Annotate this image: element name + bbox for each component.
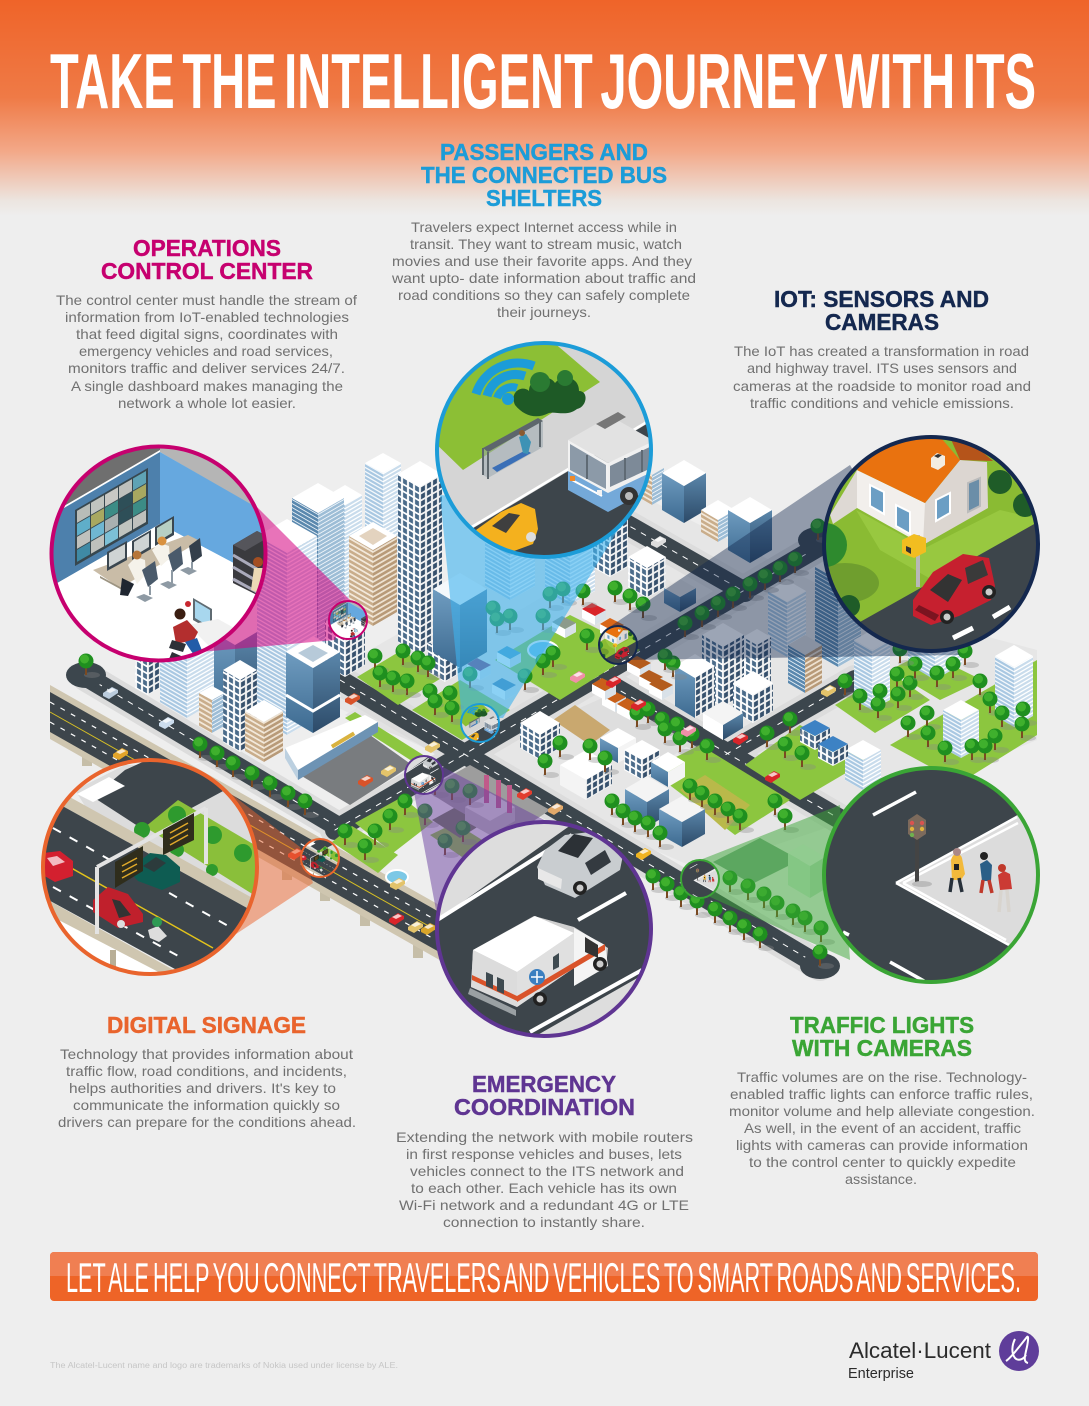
body: operations: A single dashboard makes managing the — [71, 378, 343, 394]
body: emergency: to each other. Each vehicle has its own — [411, 1180, 677, 1196]
heading: iot: CAMERAS — [825, 309, 939, 335]
body: iot: traffic conditions and vehicle emissions. — [750, 395, 1014, 411]
body: operations: network a whole lot easier. — [118, 395, 296, 411]
body: iot: The IoT has created a transformation in road — [734, 343, 1029, 359]
heading: passengers: THE CONNECTED BUS — [421, 162, 667, 188]
body: emergency: Wi-Fi network and a redundant 4G or LTE — [399, 1197, 689, 1213]
panel: passengers — [391, 139, 696, 320]
body: operations: emergency vehicles and road services, — [79, 343, 333, 359]
heading: passengers: SHELTERS — [486, 185, 602, 211]
shopping mall — [285, 715, 378, 780]
car park lot — [713, 838, 800, 884]
body: traffic lights: monitor volume and help alleviate congestion. — [729, 1103, 1035, 1119]
callout beam: digital signage — [227, 793, 313, 940]
body: traffic lights: Traffic volumes are on the rise. Technology- — [737, 1069, 1027, 1085]
dark field — [432, 808, 482, 838]
body: emergency: connection to instantly share. — [443, 1214, 645, 1230]
body: traffic lights: lights with cameras can provide information — [736, 1137, 1028, 1153]
road network — [87, 515, 855, 966]
circle: bus shelter — [430, 335, 660, 565]
body: emergency: Extending the network with mobile routers — [396, 1129, 693, 1145]
cul-de-sacs — [66, 527, 840, 979]
body: operations: The control center must handle the stream of — [56, 292, 357, 308]
parking lot — [295, 735, 412, 805]
small marker: bus shelters — [460, 703, 501, 743]
circle: highway signs — [30, 745, 285, 1048]
circle: house with sensor — [803, 425, 1050, 665]
heading: passengers: PASSENGERS AND — [440, 139, 648, 165]
body: operations — [56, 292, 357, 411]
body: emergency: vehicles connect to the ITS network and — [410, 1163, 684, 1179]
body: iot: cameras at the roadside to monitor road and — [733, 378, 1031, 394]
logo: Enterprise — [848, 1365, 914, 1382]
heading: emergency: COORDINATION — [454, 1094, 635, 1120]
body: passengers — [391, 219, 696, 320]
trees — [78, 518, 1037, 969]
fountain — [386, 870, 408, 884]
callout beam: emergency — [413, 767, 550, 910]
heading: iot — [774, 286, 989, 335]
body: passengers: their journeys. — [497, 304, 591, 320]
panel: iot — [733, 286, 1031, 411]
circle: crossing and traffic light — [815, 760, 1050, 995]
heading: traffic lights: WITH CAMERAS — [792, 1035, 972, 1061]
body: operations: information from IoT-enabled technologies — [65, 309, 349, 325]
header gradient band — [0, 0, 1089, 216]
body: digital signage: traffic flow, road conditions, and incidents, — [66, 1063, 347, 1079]
logo — [848, 1331, 1039, 1382]
factory yard — [425, 765, 550, 840]
heading: digital signage: DIGITAL SIGNAGE — [107, 1012, 306, 1038]
body: passengers: want upto- date information about traffic and — [391, 270, 696, 286]
heading: operations: OPERATIONS — [133, 235, 281, 261]
heading: traffic lights — [790, 1012, 974, 1061]
body: traffic lights: As well, in the event of an accident, traffic — [744, 1120, 1021, 1136]
parks and fields — [332, 615, 1037, 873]
body: operations: that feed digital signs, coordinates with — [76, 326, 338, 342]
buildings back cluster — [135, 453, 595, 762]
vehicles — [103, 536, 836, 935]
small marker: sensors — [595, 624, 639, 666]
heading: emergency — [454, 1071, 635, 1120]
circle: ambulance — [430, 815, 660, 1045]
body: traffic lights — [729, 1069, 1035, 1187]
body: digital signage: drivers can prepare for the conditions ahead. — [58, 1114, 356, 1130]
glass building — [788, 844, 825, 898]
heading: traffic lights: TRAFFIC LIGHTS — [790, 1012, 974, 1038]
heading: emergency: EMERGENCY — [472, 1071, 616, 1097]
panel: operations — [56, 235, 357, 411]
body: iot: and highway travel. ITS uses sensors and — [747, 360, 1017, 376]
small marker: traffic lights — [679, 859, 721, 900]
panel: traffic lights — [729, 1012, 1035, 1187]
logo: Alcatel·Lucent — [849, 1338, 991, 1363]
body: digital signage: Technology that provides information about — [60, 1046, 353, 1062]
body: digital signage: communicate the information quickly so — [73, 1097, 340, 1113]
houses — [467, 603, 673, 720]
callout beam: operations — [200, 490, 350, 652]
callout beam: sensors — [605, 465, 960, 660]
body: emergency: in first response vehicles and buses, lets — [406, 1146, 682, 1162]
body: traffic lights: to the control center to quickly expedite — [749, 1154, 1016, 1170]
buildings right cluster — [520, 460, 1033, 847]
body: passengers: road conditions so they can safely complete — [398, 287, 690, 303]
circle: control room — [40, 440, 275, 680]
callout beam: traffic lights — [700, 805, 850, 960]
body: iot — [733, 343, 1031, 411]
body: traffic lights: assistance. — [845, 1171, 917, 1187]
body: digital signage — [58, 1046, 356, 1130]
factory with chimneys — [465, 775, 515, 835]
body: emergency — [396, 1129, 693, 1230]
body: passengers: transit. They want to stream music, watch — [410, 236, 682, 252]
panel: emergency — [396, 1071, 693, 1230]
heading: iot: IOT: SENSORS AND — [774, 286, 989, 312]
small marker: digital signage — [299, 836, 344, 890]
heading: operations — [101, 235, 313, 284]
body: passengers: Travelers expect Internet access while in — [411, 219, 677, 235]
farm plots — [553, 705, 610, 745]
elevated highway — [50, 685, 510, 1000]
body: passengers: movies and use their favorite apps. And they — [392, 253, 692, 269]
small marker: operations — [327, 600, 369, 642]
callout beam: bus shelters — [440, 495, 630, 718]
trademark footnote: The Alcatel-Lucent name and logo are trademarks of Nokia used under license by ALE. — [50, 1361, 398, 1370]
heading: operations: CONTROL CENTER — [101, 258, 313, 284]
body: digital signage: helps authorities and drivers. It's key to — [69, 1080, 336, 1096]
pond — [528, 641, 558, 659]
body: traffic lights: enabled traffic lights can enforce traffic rules, — [730, 1086, 1033, 1102]
panel: digital signage — [58, 1012, 356, 1130]
body: operations: monitors traffic and deliver services 24/7. — [68, 360, 345, 376]
small marker: emergency — [404, 755, 445, 796]
heading: passengers — [421, 139, 667, 211]
isometric city map — [50, 453, 1037, 1000]
